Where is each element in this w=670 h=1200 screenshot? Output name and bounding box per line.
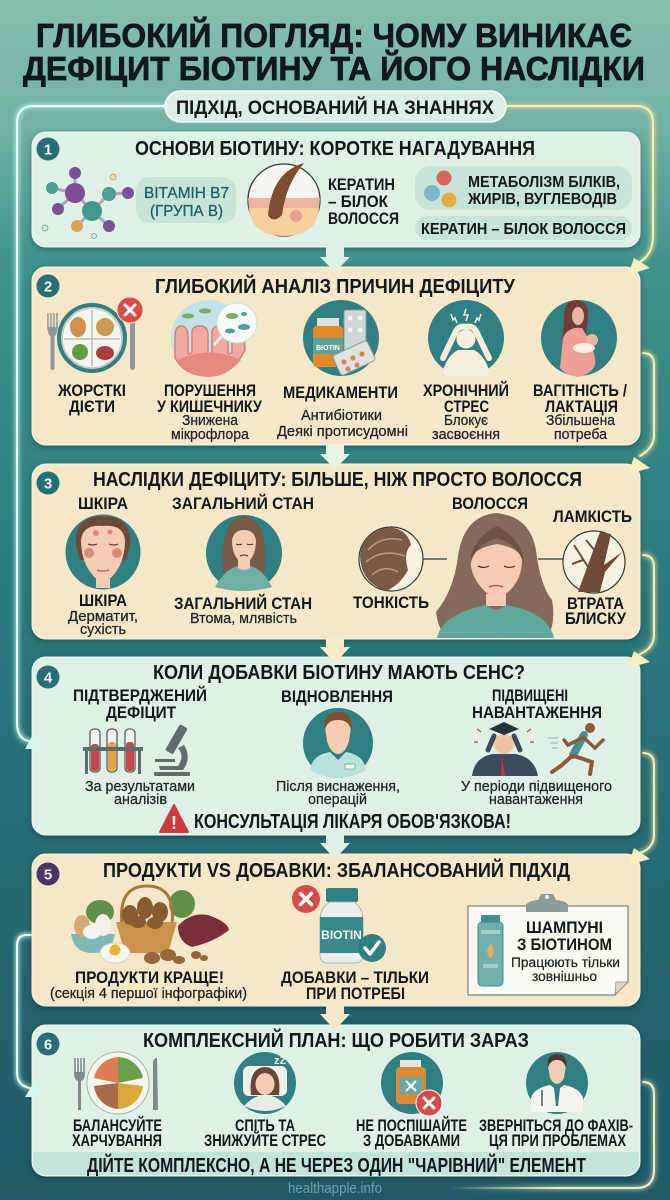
panel 3: consequences xyxy=(32,464,640,639)
icon: molecule xyxy=(42,167,134,238)
panel 3 background xyxy=(32,464,640,639)
badge 6: 6 xyxy=(44,1036,52,1054)
badge 4: 4 xyxy=(44,670,53,686)
labels: top row: ВОЛОССЯ xyxy=(452,494,528,513)
arrow: 3 to 4 xyxy=(320,638,350,663)
label: sleep and reduce stress xyxy=(204,1116,326,1150)
label: during loads: У періоди підвищеного xyxy=(461,779,612,795)
heading 1: ОСНОВИ БІОТИНУ: КОРОТКЕ НАГАДУВАННЯ xyxy=(135,138,535,160)
icon: doctor specialist xyxy=(526,1052,588,1114)
icon: sleeping person xyxy=(234,1052,296,1114)
label: medications xyxy=(277,383,408,440)
icon: doctor xyxy=(303,708,373,778)
label: balance nutrition: БАЛАНСУЙТЕ xyxy=(73,1116,162,1135)
pill: metabolism: ЖИРІВ, ВУГЛЕВОДІВ xyxy=(467,191,617,208)
icon: microscope xyxy=(154,724,190,776)
label: increased loads: ПІДВИЩЕНІ xyxy=(492,686,568,705)
label: by test results xyxy=(85,779,195,808)
badge 5: 5 xyxy=(44,866,52,884)
heading 3: НАСЛІДКИ ДЕФІЦИТУ: БІЛЬШЕ, НІЖ ПРОСТО ВОЛОССЯ xyxy=(93,469,582,491)
arrow: into section 4 right xyxy=(628,651,650,668)
arrow: 1 to 2 xyxy=(320,246,350,272)
label: increased loads xyxy=(472,686,602,722)
label: confirmed deficiency: ДЕФІЦИТ xyxy=(106,703,177,722)
label: supplements only if needed: ДОБАВКИ – ТІЛЬКИ xyxy=(281,968,429,987)
flow line: right yellow from pill to section 2 xyxy=(506,106,653,262)
label: by test results: За результатами xyxy=(85,779,195,795)
icon: test tubes xyxy=(83,729,143,774)
badge 3 xyxy=(36,472,60,494)
label: increased loads: НАВАНТАЖЕННЯ xyxy=(472,703,602,722)
label: by test results: аналізів xyxy=(114,792,167,808)
labels: top row: ЛАМКІСТЬ xyxy=(553,507,632,526)
label: chronic stress: СТРЕС xyxy=(444,397,489,416)
label: pregnancy xyxy=(533,381,627,443)
label: during loads xyxy=(461,779,612,808)
label: gut disorders: мікрофлора xyxy=(171,427,250,443)
icon: medications: BIOTIN xyxy=(316,345,340,352)
flow line: section 3 to 4 xyxy=(640,555,654,654)
arrow: 4 to 5 xyxy=(320,834,350,859)
arrow: into section 2 xyxy=(628,258,650,275)
badge 3: 3 xyxy=(44,476,52,492)
icon: foods xyxy=(71,886,229,964)
subtitle pill: ПІДХІД, ОСНОВАНИЙ НА ЗНАННЯХ xyxy=(176,97,494,119)
connector: hair right xyxy=(538,558,563,560)
callout: doctor consult: КОНСУЛЬТАЦІЯ ЛІКАРЯ ОБОВ'ЯЗКОВА! xyxy=(194,811,511,833)
flow line: section 2 to 3 xyxy=(640,353,654,456)
label: general condition: ЗАГАЛЬНИЙ СТАН xyxy=(174,594,312,613)
label: pregnancy: потреба xyxy=(554,427,608,443)
arrow: 2 to 3 xyxy=(320,444,350,469)
note: shampoos: ШАМПУНІ xyxy=(526,918,603,937)
label: vitamin B7 xyxy=(136,177,236,223)
flow line: section 6 to footer xyxy=(450,1082,654,1188)
panel 6: comprehensive plan xyxy=(32,1025,640,1177)
label: pregnancy: ЛАКТАЦІЯ xyxy=(545,397,618,416)
connector: hair left xyxy=(423,558,447,560)
label: skin xyxy=(68,591,138,638)
label: do not rush: З ДОБАВКАМИ xyxy=(363,1131,460,1150)
label: balance nutrition: ХАРЧУВАННЯ xyxy=(72,1131,162,1150)
label: strict diets: ДІЄТИ xyxy=(69,397,115,416)
label: chronic stress: Блокує xyxy=(444,413,489,429)
label: skin: ШКІРА xyxy=(79,591,127,610)
label: general condition: Втома, млявість xyxy=(190,611,297,627)
note: shampoos xyxy=(468,894,628,995)
icon: stressed graduate xyxy=(472,722,538,776)
arrow: into section 5 xyxy=(628,848,650,865)
icon: hair close-up thin xyxy=(359,527,423,591)
label: gut disorders: ПОРУШЕННЯ xyxy=(164,381,256,400)
arrow: into section 3 xyxy=(628,457,650,474)
label: supplements only if needed: ПРИ ПОТРЕБІ xyxy=(306,984,405,1003)
label: pregnancy: ВАГІТНІСТЬ / xyxy=(533,381,627,400)
label: after exhaustion xyxy=(276,779,400,808)
label: strict diets: ЖОРСТКІ xyxy=(57,381,126,400)
panel 5: food vs supplements xyxy=(32,854,640,1006)
label: do not rush: НЕ ПОСПІШАЙТЕ xyxy=(356,1116,467,1135)
label: medications: МЕДИКАМЕНТИ xyxy=(283,383,398,402)
label: products better: ПРОДУКТИ КРАЩЕ! xyxy=(75,968,224,987)
label: after exhaustion: операцій xyxy=(308,792,367,808)
arrow: into section 4 left xyxy=(25,734,45,749)
panel 1: basics xyxy=(32,132,640,247)
label: sleep and reduce stress: ЗНИЖУЙТЕ СТРЕС xyxy=(204,1131,326,1150)
arrow: into section 6 xyxy=(25,1082,45,1097)
heading 4: КОЛИ ДОБАВКИ БІОТИНУ МАЮТЬ СЕНС? xyxy=(153,662,525,684)
title xyxy=(23,16,645,87)
icon: pregnancy xyxy=(541,300,617,377)
illustration: woman with hair loss xyxy=(436,513,554,638)
pill: keratin: КЕРАТИН – БІЛОК ВОЛОССЯ xyxy=(421,221,626,238)
icon: plate with X xyxy=(47,297,143,373)
label: confirmed deficiency xyxy=(73,686,207,722)
icon: intestine xyxy=(171,300,257,376)
label: see a specialist: ЦЯ ПРИ ПРОБЛЕМАХ xyxy=(489,1131,626,1150)
heading 2: ГЛИБОКИЙ АНАЛІЗ ПРИЧИН ДЕФІЦИТУ xyxy=(155,274,516,298)
label: gut disorders xyxy=(157,381,262,443)
label: gut disorders: Знижена xyxy=(182,413,239,429)
labels: top row xyxy=(78,494,632,526)
labels: top row: ШКІРА xyxy=(78,494,128,513)
subtitle pill xyxy=(165,91,506,122)
label: supplements only if needed xyxy=(281,968,429,1003)
panel 2 background xyxy=(32,267,640,445)
label: chronic stress xyxy=(423,381,509,443)
label: thinness: ТОНКІСТЬ xyxy=(353,593,429,612)
badge 2: 2 xyxy=(44,278,52,296)
flow line: section 5 to 6 xyxy=(17,935,32,1088)
label: sleep and reduce stress: СПІТЬ ТА xyxy=(235,1116,295,1135)
note: shampoos: Працюють тільки xyxy=(511,955,620,970)
panel 4: when supplements make sense xyxy=(32,657,640,835)
badge 5 xyxy=(36,862,60,886)
label: during loads: навантаження xyxy=(489,792,583,808)
label: gut disorders: У КИШЕЧНИКУ xyxy=(157,397,262,416)
label: products better xyxy=(50,968,247,1002)
label: products better: (секція 4 першої інфографіки) xyxy=(50,986,247,1002)
icon: runner xyxy=(548,723,603,774)
heading 6: КОМПЛЕКСНИЙ ПЛАН: ЩО РОБИТИ ЗАРАЗ xyxy=(143,1028,529,1052)
icon: bottle with X xyxy=(381,1052,443,1116)
label: strict diets xyxy=(57,381,126,416)
note: shampoos: З БІОТИНОМ xyxy=(517,935,612,954)
text: keratin: КЕРАТИН xyxy=(328,175,395,194)
pill: keratin xyxy=(415,216,632,240)
label: general condition xyxy=(174,594,312,627)
panel 5 background xyxy=(32,854,640,1006)
icon: biotin bottle: BIOTIN xyxy=(321,928,362,942)
label: loss of shine: ВТРАТА xyxy=(567,594,624,613)
title: ДЕФІЦИТ БІОТИНУ ТА ЙОГО НАСЛІДКИ xyxy=(23,49,645,87)
heading 5: ПРОДУКТИ VS ДОБАВКИ: ЗБАЛАНСОВАНИЙ ПІДХІД xyxy=(103,858,570,882)
label: vitamin B7: ВІТАМІН В7 xyxy=(144,185,229,202)
label: pregnancy: Збільшена xyxy=(546,413,616,429)
badge 1: 1 xyxy=(44,142,52,158)
label: after exhaustion: Після виснаження, xyxy=(276,779,400,795)
label: chronic stress: ХРОНІЧНИЙ xyxy=(423,381,509,400)
icon: skin xyxy=(66,514,140,590)
icon: brittle hair xyxy=(563,531,625,593)
text: keratin xyxy=(328,175,399,228)
flow line: left cyan from pill to section 4 xyxy=(17,106,165,741)
icon: stress xyxy=(428,300,504,376)
icon: biotin bottle xyxy=(292,885,386,963)
text: keratin: – БІЛОК xyxy=(328,192,389,211)
badge 6 xyxy=(36,1032,60,1056)
arrow: 5 to 6 xyxy=(320,1005,350,1030)
label: chronic stress: засвоєння xyxy=(432,427,500,443)
badge 1 xyxy=(36,138,60,160)
label: medications: Антибіотики xyxy=(301,408,382,424)
label: skin: сухість xyxy=(80,622,126,638)
label: see a specialist xyxy=(479,1116,633,1150)
icon: hair follicle xyxy=(248,163,320,236)
label: loss of shine: БЛИСКУ xyxy=(565,609,626,628)
callout: doctor consult: ! xyxy=(171,813,177,833)
footer: source: healthapple.info xyxy=(288,1180,382,1197)
label: do not rush xyxy=(356,1116,467,1150)
icon: medications xyxy=(303,300,379,376)
pill: metabolism: МЕТАБОЛІЗМ БІЛКІВ, xyxy=(468,174,620,191)
icon: sleeping person: zZ xyxy=(274,1055,286,1067)
labels: top row: ЗАГАЛЬНИЙ СТАН xyxy=(172,494,314,513)
panel 4 background xyxy=(32,657,640,835)
panel 1 background xyxy=(32,132,640,247)
icon: general condition xyxy=(206,515,282,591)
pill: metabolism xyxy=(415,166,632,210)
label: skin: Дерматит, xyxy=(68,609,138,625)
panel 6 background xyxy=(32,1025,640,1176)
callout: doctor consult xyxy=(160,805,511,833)
badge 2 xyxy=(36,274,60,298)
flow line: section 4 to 5 xyxy=(640,753,654,853)
label: loss of shine xyxy=(565,594,626,628)
badge 4 xyxy=(36,666,60,688)
text: keratin: ВОЛОССЯ xyxy=(328,209,399,228)
icon: balanced plate xyxy=(74,1052,158,1114)
title: ГЛИБОКИЙ ПОГЛЯД: ЧОМУ ВИНИКАЄ xyxy=(36,16,632,54)
note: shampoos: зовнішньо xyxy=(532,969,597,984)
label: balance nutrition xyxy=(72,1116,162,1150)
panel 2: causes xyxy=(32,267,640,445)
label: confirmed deficiency: ПІДТВЕРДЖЕНИЙ xyxy=(73,686,207,705)
label: medications: Деякі протисудомні xyxy=(277,424,408,440)
label: vitamin B7: (ГРУПА В) xyxy=(150,203,223,220)
label: recovery: ВІДНОВЛЕННЯ xyxy=(281,687,393,706)
